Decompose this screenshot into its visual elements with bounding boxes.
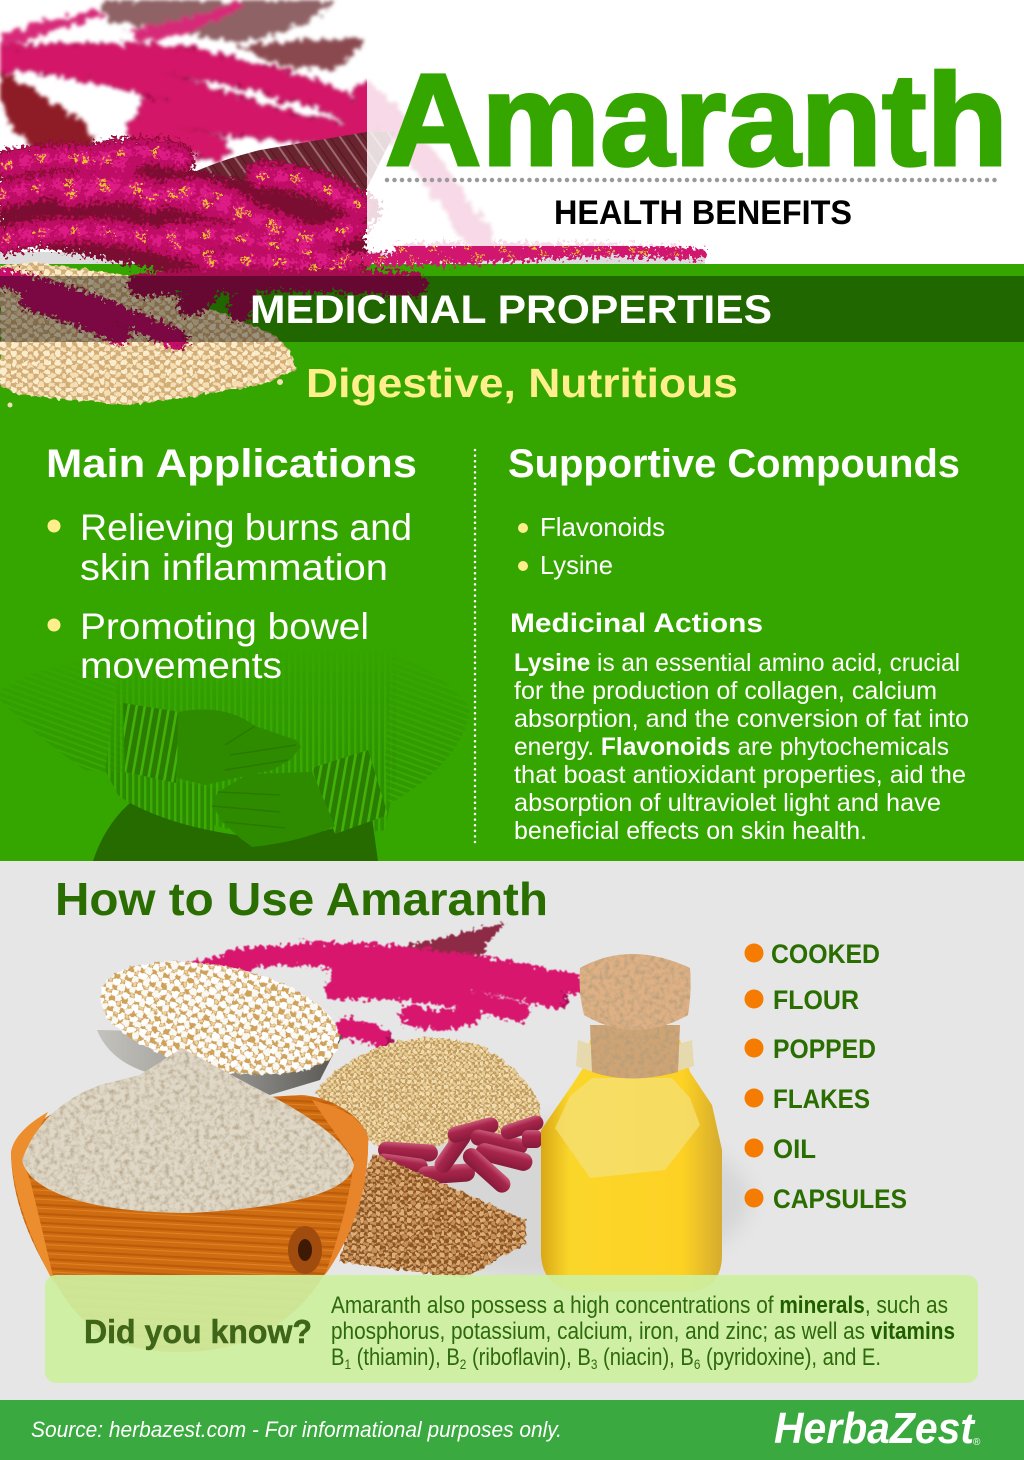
callout text xyxy=(331,1292,955,1372)
illustration: amaranth products xyxy=(11,923,750,1352)
callout text: 6 xyxy=(694,1356,701,1372)
callout text: phosphorus, potassium, calcium, iron, and zinc; as well as vitamins xyxy=(331,1318,955,1345)
wooden bowl with flour xyxy=(11,1048,368,1352)
list: applications xyxy=(48,507,412,686)
amaranth bar xyxy=(339,1153,526,1278)
list: how to use xyxy=(744,939,907,1214)
item: flour: FLOUR xyxy=(773,985,859,1015)
callout text: 1 xyxy=(344,1356,351,1372)
panel: did you know xyxy=(45,1275,978,1383)
text block: medicinal actions: Lysine is an essential amino acid, crucial xyxy=(514,649,960,677)
logo: ® xyxy=(973,1437,981,1448)
item: oil xyxy=(744,1134,816,1164)
heading: medicinal properties: MEDICINAL PROPERTIES xyxy=(250,288,772,332)
item: capsules: CAPSULES xyxy=(773,1184,907,1214)
item: flakes: FLAKES xyxy=(773,1084,870,1114)
callout text: (pyridoxine), and E. xyxy=(700,1344,881,1371)
amaranth flower xyxy=(118,923,578,1040)
list: compounds: Flavonoids xyxy=(540,512,665,542)
illustration: seed pile xyxy=(0,262,297,408)
source note: Source: herbazest.com - For informational purposes only. xyxy=(31,1417,562,1442)
footer xyxy=(0,1400,1024,1460)
callout text: 3 xyxy=(591,1356,598,1372)
list: compounds xyxy=(518,512,665,580)
dark banner xyxy=(0,276,1024,342)
illustration: amaranth leaf xyxy=(160,132,395,222)
list: applications: Promoting bowel xyxy=(80,606,369,647)
heading: main applications: Main Applications xyxy=(46,442,417,486)
item: oil: OIL xyxy=(773,1134,816,1164)
item: cooked: COOKED xyxy=(771,939,880,969)
subheading: properties: Digestive, Nutritious xyxy=(306,360,738,406)
heading: medicinal actions: Medicinal Actions xyxy=(510,608,763,638)
logo: HerbaZest xyxy=(774,1404,976,1453)
bowl of popped amaranth xyxy=(90,942,350,1095)
callout text: (thiamin), B xyxy=(351,1344,460,1371)
callout heading: Did you know? xyxy=(84,1313,312,1350)
oil bottle xyxy=(541,954,722,1292)
callout text: B xyxy=(331,1344,347,1371)
callout text: 2 xyxy=(460,1356,467,1372)
text block: medicinal actions: absorption, and the conversion of fat into xyxy=(514,705,969,733)
subtitle: HEALTH BENEFITS xyxy=(554,194,852,232)
list: applications: movements xyxy=(80,645,282,686)
text block: medicinal actions: for the production of collagen, calcium xyxy=(514,677,937,705)
illustration: blurred amaranth flower top xyxy=(0,0,480,240)
illustration: amaranth flower spikes xyxy=(0,152,700,340)
callout text: (riboflavin), B xyxy=(466,1344,591,1371)
panel: main applications xyxy=(46,442,417,686)
list: applications: skin inflammation xyxy=(80,547,388,588)
text block: medicinal actions: absorption of ultraviolet light and have xyxy=(514,789,941,817)
text block: medicinal actions xyxy=(514,649,969,845)
callout text: (niacin), B xyxy=(597,1344,694,1371)
capsules xyxy=(375,1114,545,1196)
panel: supportive compounds xyxy=(508,442,969,845)
title: Amaranth xyxy=(385,46,1008,193)
callout text: Amaranth also possess a high concentrations of minerals, such as xyxy=(331,1292,948,1319)
seed pile xyxy=(315,1038,541,1148)
list: compounds: Lysine xyxy=(540,550,613,580)
heading: how to use amaranth: How to Use Amaranth xyxy=(55,873,548,925)
text block: medicinal actions: beneficial effects on skin health. xyxy=(514,817,867,845)
text block: medicinal actions: energy. Flavonoids are phytochemicals xyxy=(514,733,949,761)
text block: medicinal actions: that boast antioxidant properties, aid the xyxy=(514,761,966,789)
soft shadow xyxy=(370,1120,750,1280)
heading: supportive compounds: Supportive Compounds xyxy=(508,442,960,486)
title panel xyxy=(367,0,1024,246)
item: popped: POPPED xyxy=(773,1034,876,1064)
illustration: man holding stomach xyxy=(22,683,467,861)
list: applications: Relieving burns and xyxy=(80,507,412,548)
